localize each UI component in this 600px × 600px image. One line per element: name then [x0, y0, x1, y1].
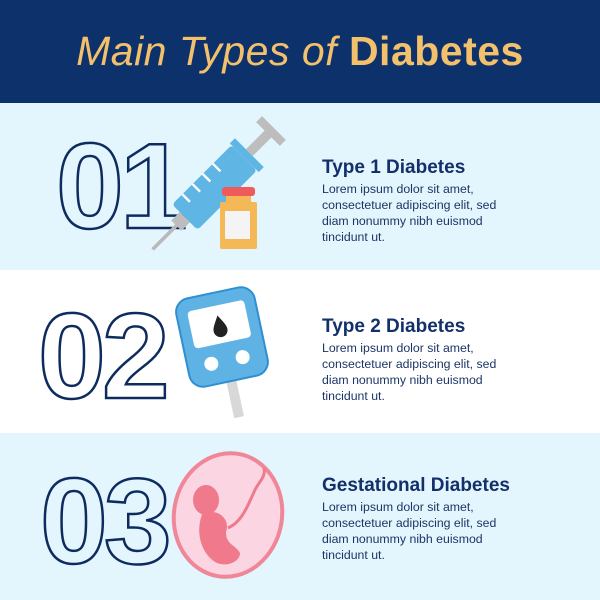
- text: Type 2 Diabetes: [322, 316, 465, 337]
- panel: row 1 background: [0, 103, 600, 270]
- panel: row 3 background: [0, 433, 600, 600]
- icon: vial: [220, 187, 257, 249]
- text: Lorem ipsum dolor sit amet, consectetuer adipiscing elit, sed diam nonummy nibh euismod tincidunt ut.: [322, 341, 496, 403]
- text block: gestational: [322, 475, 510, 562]
- number 02: 02: [38, 288, 166, 424]
- text: Lorem ipsum dolor sit amet, consectetuer adipiscing elit, sed diam nonummy nibh euismod tincidunt ut.: [322, 182, 496, 244]
- header banner: [0, 0, 600, 103]
- icon: glucometer: [174, 285, 278, 426]
- text: Lorem ipsum dolor sit amet, consectetuer adipiscing elit, sed diam nonummy nibh euismod tincidunt ut.: [322, 500, 496, 562]
- text: Type 1 Diabetes: [322, 157, 465, 178]
- number 03: 03: [40, 453, 168, 589]
- text: Gestational Diabetes: [322, 475, 510, 496]
- icon: fetus in womb: [164, 445, 292, 585]
- number 01: 01: [56, 118, 185, 254]
- icon: syringe: [138, 114, 288, 264]
- text block: type 1: [322, 157, 496, 244]
- text block: type 2: [322, 316, 496, 403]
- title: Main Types of Diabetes: [76, 28, 524, 74]
